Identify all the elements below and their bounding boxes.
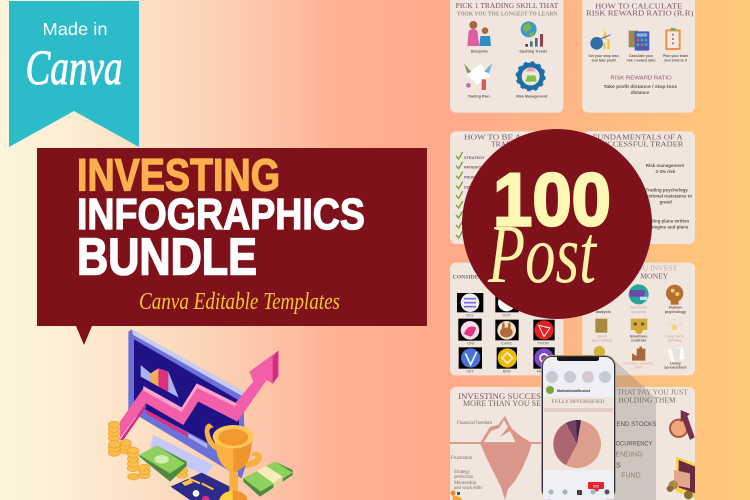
label: long term holding: Long term [665,334,685,338]
heading: more than you see: MORE THAN YOU SEE [463,399,546,408]
credit card [171,473,237,500]
icon: book accounting [595,319,607,333]
icon: spotting trends [521,21,543,47]
illustration: growth monitor and trophy [108,329,293,500]
label: bnb: BNB [503,369,511,374]
label: book accounting: Book [597,334,608,338]
text: made in: Made in [42,19,108,39]
label: uni: UNI [467,340,474,345]
iceberg waterline [450,442,542,444]
monitor [128,329,245,478]
title: bundle: BUNDLE [77,228,257,286]
icon: sol [457,293,483,312]
label: take profit: and take profit [592,59,617,63]
checklist text: STRATEGY [464,156,485,160]
label: stick to it: and stick to it [664,59,688,63]
label: using: Using [670,361,681,365]
icon: human psychology [666,285,683,305]
label: plan your trade: Plan your trade [663,54,688,58]
subheading: risk reward ratio: RISK REWARD RATIO [610,75,672,81]
post description [544,408,613,412]
iceberg [480,416,532,500]
label: financial freedom: Financial freedom [457,421,492,426]
heading: trader: TRADER [491,140,522,149]
screen chart [141,365,178,397]
heading: how to be a: HOW TO BE A [464,133,522,142]
label: emotions control: Emotions [630,334,647,338]
heading: consider: CONSIDER [453,275,484,281]
subtitle: Canva Editable Templates [139,289,340,315]
checklist text: PROFIT [464,175,479,179]
subheading: longest to learn: TOOK YOU THE LONGEST TO LEARN [457,12,558,18]
text: trading plans: Trading plans written [644,218,689,223]
icon: coin [594,346,605,357]
text: 100: 100 [493,158,611,242]
badge: 100 post [462,129,652,319]
panel: risk reward ratio [582,0,695,113]
post content [543,397,614,471]
checklist ticks [456,152,463,238]
list: fund: FUND [621,472,641,479]
label: industry specific: Industry specific [623,361,655,365]
title: investing: INVESTING [77,150,280,200]
phone mockup [541,355,616,500]
label: accounting: accounting [592,339,613,343]
icon: emotions control [631,319,647,334]
heading: risk reward ratio: RISK REWARD RATIO (R.R) [586,8,694,17]
heading: holding them: HOLDING THEM [618,396,676,405]
icon: wallet and coins [667,457,695,499]
checklist text: PATIENCE [464,166,483,170]
phone action bar [543,470,614,499]
panel: how to be a trader [450,131,563,244]
label: risk management: Risk Management [516,95,548,99]
heading: that pay you just: THAT PAY YOU JUST [617,388,688,397]
icon: matic [533,347,555,369]
label: trading plan: Trading Plan [468,95,490,99]
label: skills: skills [634,366,643,370]
cash stack left [139,446,187,482]
icon: tron [533,320,555,340]
icon: corner figure [450,490,463,500]
label: frustration: Frustration [451,456,473,461]
text: emotional resistance: Emotional resistance to [641,194,692,199]
panel: stocks that pay you [582,387,695,500]
heading: ways you invest: OU INVEST [637,264,678,273]
label: perfection: perfection [454,475,474,480]
label: human psychology: Human [669,306,682,310]
icon: technical analysis [629,284,649,304]
like badge: 555 [593,484,599,488]
panel: fundamentals [582,131,695,244]
text: strategies: strategies and plans [645,224,689,229]
profile avatar [546,386,554,394]
panel: pick 1 trading skill [450,0,563,113]
text: greed: greed [660,200,672,205]
label: risk reward: risk / reward ratio [626,59,656,63]
phone tab icons [548,490,610,495]
icon: factory [632,347,645,361]
heading: fundamentals of a: FUNDAMENTALS OF A [593,133,683,142]
heading: how to calculate: HOW TO CALCULATE [595,2,683,11]
title: infographics: INFOGRAPHICS [77,190,365,239]
label: technical analysis: Technical [630,306,647,310]
label: discipline: Discipline [471,50,488,54]
story circles [546,371,611,383]
label: analysis: analysis [631,310,646,314]
list: lending: ENDING [615,452,643,459]
ribbon: made in canva [9,1,139,147]
label: spreadsheet: spreadsheet [664,366,687,370]
label: spotting trends: Spotting Trends [519,50,547,54]
growth arrow [120,351,278,440]
list: cryptocurrency: OCURRENCY [616,441,653,448]
text: post: Post [487,208,598,301]
list: dividend stocks: END STOCKS [616,421,656,428]
coin stacks [108,421,188,480]
monitor stand [150,435,213,476]
panel: ways to invest money [582,263,695,375]
label: calculate: Calculate your [629,54,654,58]
icon: risk management [517,62,545,90]
label: strategy perfection: Strategy [454,470,471,475]
icon: money bag [590,29,611,50]
heading: investing success: INVESTING SUCCESS [458,392,546,401]
list: reits: S [616,462,621,469]
heading: money: MONEY [640,272,669,281]
profile name: Motivationalfinsbot [557,389,591,393]
text: canva: Canva [26,39,122,95]
text: formula line one: Take profit distance / stop loss [604,84,678,89]
text: risk management: Risk management [646,163,685,168]
icon: coin arrow [670,410,695,440]
label: vet: VET [466,369,474,374]
icon: discipline [467,21,491,46]
heading: pick 1 trading skill: PICK 1 TRADING SKILL THAT [456,1,559,10]
phone long shadow [610,360,656,500]
label: dot: DOT [502,312,511,317]
screen bar [147,410,188,437]
label: work ethic: and work ethic [454,486,483,491]
text: percent risk: 2-3% risk [655,169,676,174]
pie chart [553,420,601,468]
post title: FULLY DIVERSIFIED [552,399,605,405]
icon: vet [459,347,482,369]
text: formula line two: distance [631,90,650,95]
checklist text: DISCIPLINE [464,185,486,189]
label: cake: CAKE [501,340,512,345]
label: stop loss: Set your stop loss [589,54,619,58]
label: matic: MATIC [537,369,549,374]
icon: dot [495,293,519,312]
label: sol: SOL [466,312,475,317]
label: holding: holding [668,339,682,343]
label: mentorship: Mentorship [454,481,477,486]
icon: spreadsheet cards [667,347,685,362]
icon: uni [458,319,482,341]
like badge [588,482,604,492]
label: controls: controls [631,339,646,343]
label: psychology: psychology [665,310,687,314]
icon: cake [495,320,519,340]
phone notch [557,357,599,361]
text: trading psychology: Trading psychology [645,188,688,193]
banner: title box [37,148,427,345]
checklist text [464,156,486,189]
panel: consider crypto [450,263,563,375]
heading: successful trader: SUCCESSFUL TRADER [597,140,684,149]
trophy [205,423,262,500]
icon: trading plan [464,63,492,90]
cash stack right [243,462,293,497]
icon: bnb [497,347,517,369]
panel: investing success iceberg [450,387,563,500]
icon: calculator [629,31,649,51]
icon: long term holding [668,319,681,330]
icon: plan clipboard [665,28,681,50]
label: tron: TRON [538,340,549,345]
label: fundamental analysis: analysis [596,310,611,314]
